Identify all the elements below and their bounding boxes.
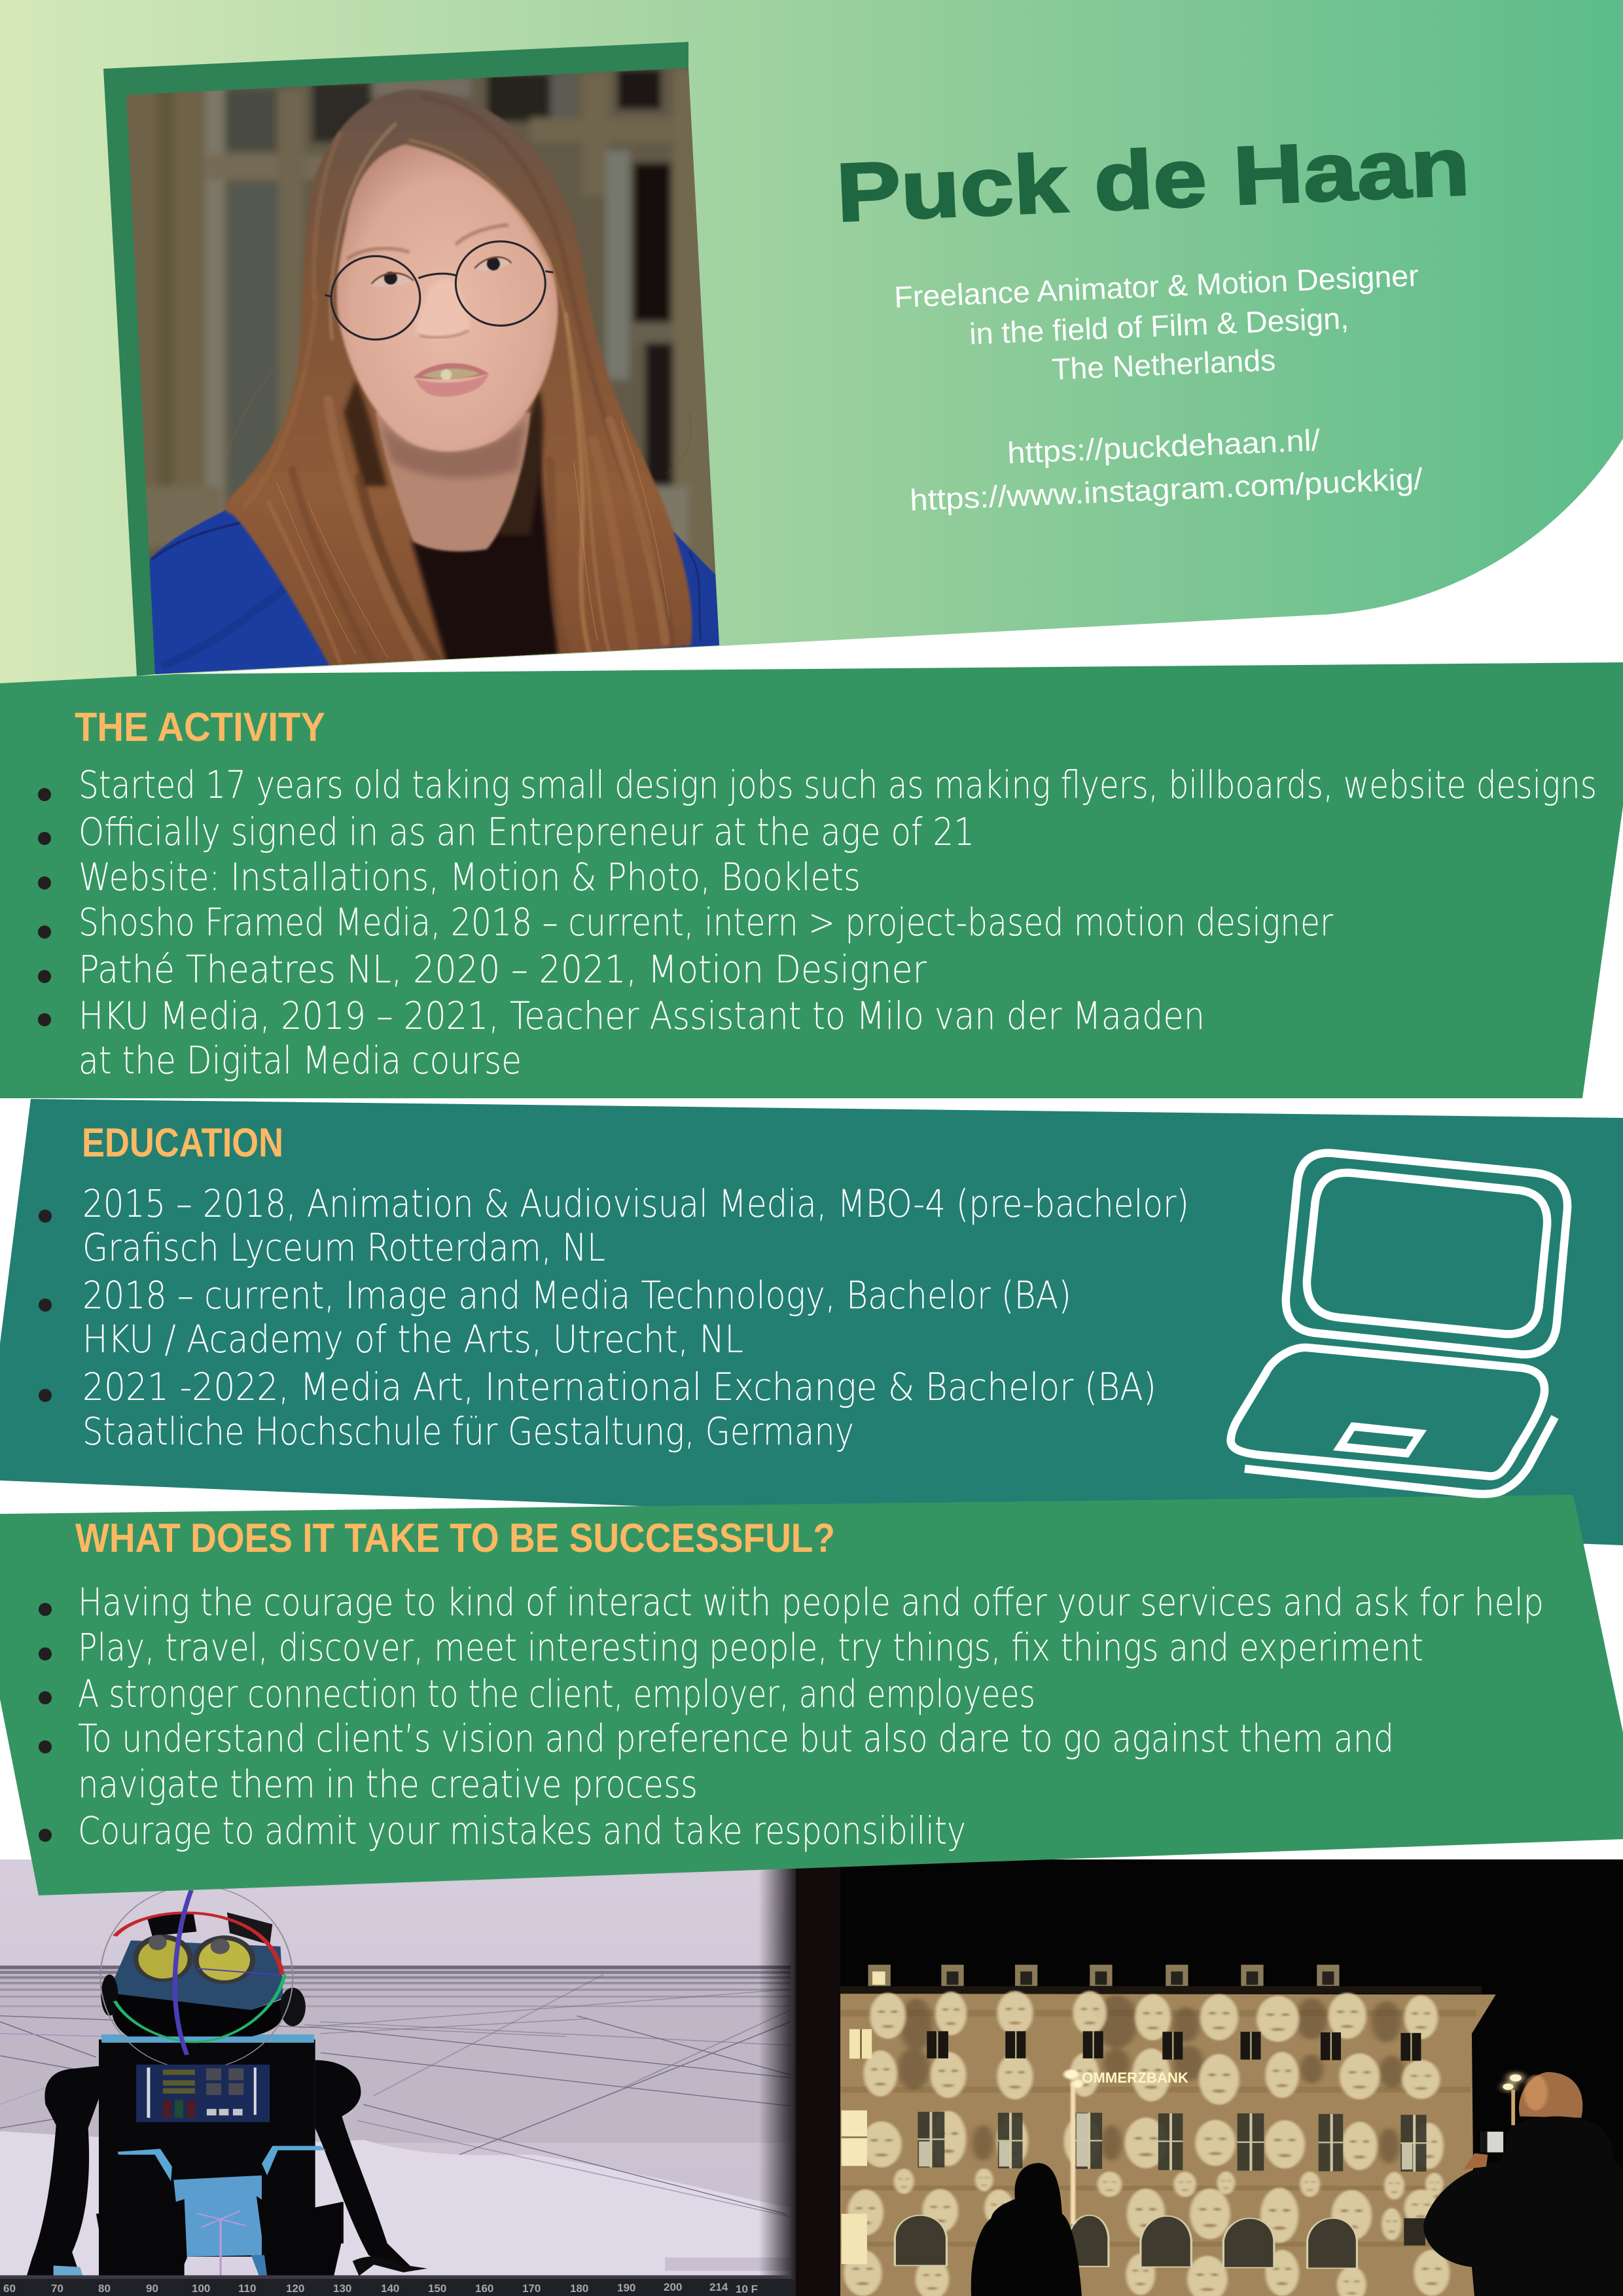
timeline numbers: 100 — [192, 2282, 210, 2295]
subtitle and links — [893, 258, 1423, 517]
timeline numbers: 160 — [475, 2282, 493, 2295]
bullet list: activity — [38, 762, 1597, 1083]
subtitle and links: https://www.instagram.com/puckkig/ — [909, 461, 1423, 517]
timeline numbers: 180 — [570, 2282, 588, 2295]
bullet list: education: 2018 – current, Image and Media Technology, Bachelor (BA) — [82, 1273, 1071, 1318]
bullet list: activity: Shosho Framed Media, 2018 – current, intern > project-based motion designer — [79, 900, 1333, 944]
heading: successful: WHAT DOES IT TAKE TO BE SUCCESSFUL? — [75, 1516, 835, 1561]
subtitle and links: The Netherlands — [1051, 343, 1276, 386]
timeline numbers — [4, 2283, 758, 2293]
timeline numbers: 150 — [428, 2282, 446, 2295]
bullet list: successful — [39, 1580, 1544, 1853]
subtitle and links: in the field of Film & Design, — [969, 301, 1349, 351]
subtitle and links: Freelance Animator & Motion Designer — [893, 258, 1419, 314]
panel: education band — [0, 1099, 1623, 1545]
building sign: OMMERZBANK — [1082, 2070, 1188, 2086]
heading: education: EDUCATION — [82, 1121, 283, 1166]
photo: portrait of Puck de Haan — [118, 52, 740, 694]
timeline numbers: 130 — [333, 2282, 351, 2295]
bullet list: activity: at the Digital Media course — [79, 1038, 522, 1083]
panel: activity band — [0, 662, 1623, 1098]
bullet list: activity: Website: Installations, Motion & Photo, Booklets — [79, 855, 861, 899]
timeline numbers: 200 — [664, 2281, 682, 2293]
title: Puck de Haan — [834, 120, 1471, 239]
bullet list: education: HKU / Academy of the Arts, Utrecht, NL — [82, 1317, 743, 1361]
timeline numbers: 140 — [381, 2282, 399, 2295]
timeline numbers: 190 — [617, 2282, 635, 2294]
subtitle and links: https://puckdehaan.nl/ — [1007, 423, 1321, 470]
timeline numbers: 170 — [522, 2282, 541, 2295]
timeline numbers: 120 — [286, 2282, 304, 2295]
bullet list: activity: Pathé Theatres NL, 2020 – 2021, Motion Designer — [79, 947, 927, 992]
photo: projection of faces on a building at night — [796, 1859, 1623, 2296]
photo: animated robot on screen — [0, 1856, 855, 2296]
photo frame — [103, 42, 719, 676]
timeline numbers: 10 F — [736, 2283, 758, 2295]
panel: what does it take to be successful — [0, 1495, 1623, 1895]
timeline numbers: 214 — [709, 2281, 728, 2293]
bullet list: education: 2021 -2022, Media Art, International Exchange & Bachelor (BA) — [82, 1365, 1156, 1409]
bullet list: successful: Courage to admit your mistakes and take responsibility — [78, 1808, 966, 1853]
bullet list: activity: HKU Media, 2019 – 2021, Teacher Assistant to Milo van der Maaden — [79, 994, 1205, 1038]
timeline numbers: 90 — [146, 2282, 158, 2295]
bullet list: successful: navigate them in the creative process — [78, 1762, 698, 1806]
bullet list: education: Grafisch Lyceum Rotterdam, NL — [82, 1225, 605, 1270]
bullet list: activity: Officially signed in as an Entrepreneur at the age of 21 — [79, 810, 974, 854]
timeline numbers: 110 — [238, 2282, 256, 2295]
panel: header background — [0, 0, 1623, 683]
bullet list: education — [39, 1181, 1189, 1454]
timeline numbers: 80 — [98, 2282, 111, 2295]
bullet list: successful: A stronger connection to the client, employer, and employees — [78, 1672, 1035, 1716]
heading: the activity: THE ACTIVITY — [75, 705, 325, 750]
timeline numbers: 70 — [51, 2282, 63, 2295]
icon: laptop — [1231, 1153, 1567, 1494]
bullet list: successful: To understand client’s vision and preference but also dare to go against them and — [78, 1716, 1394, 1761]
bullet list: education: 2015 – 2018, Animation & Audiovisual Media, MBO-4 (pre-bachelor) — [82, 1181, 1189, 1226]
timeline numbers: 60 — [3, 2282, 16, 2295]
bullet list: education: Staatliche Hochschule für Gestaltung, Germany — [82, 1409, 854, 1454]
